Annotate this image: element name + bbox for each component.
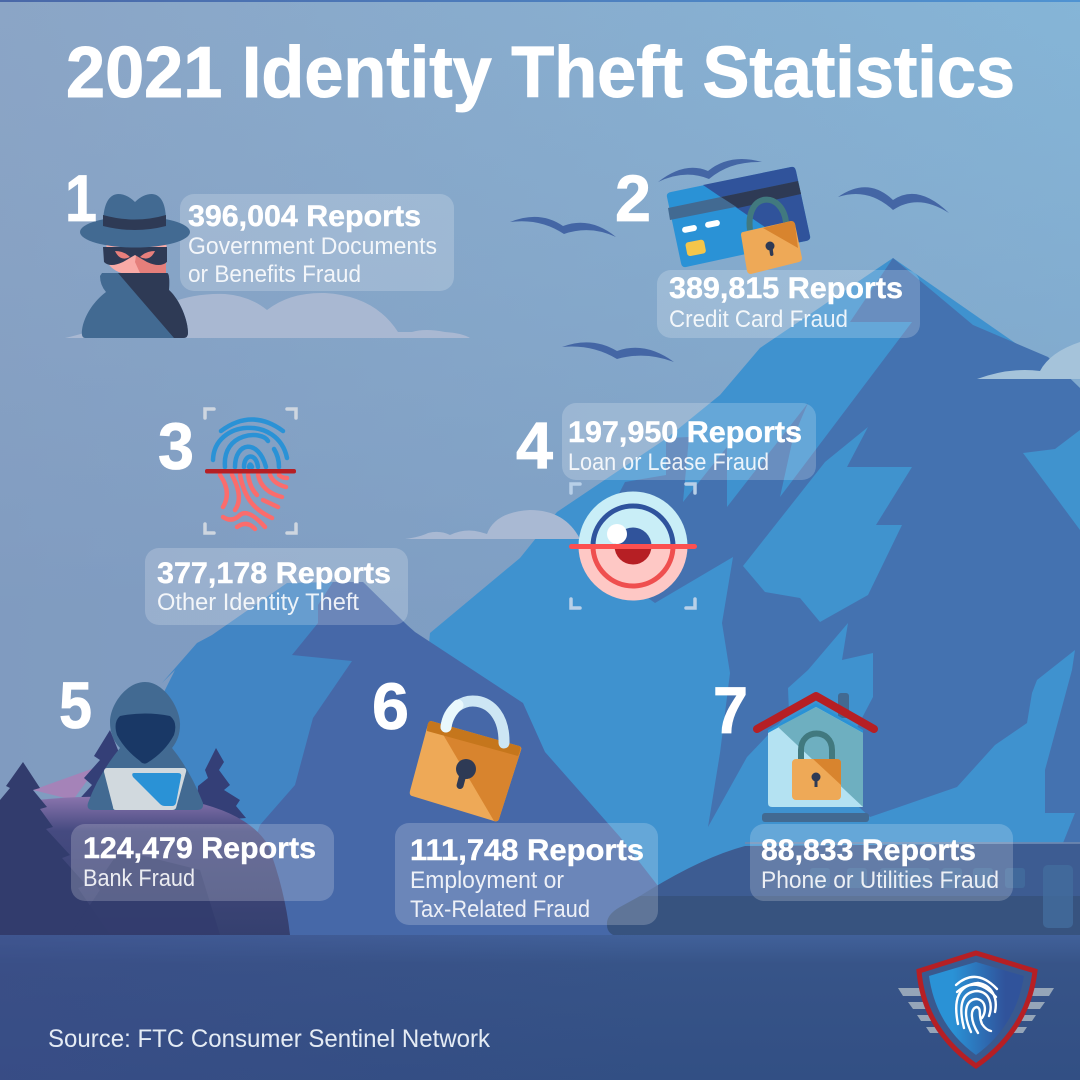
icon: spy in hat and mask bbox=[80, 194, 190, 338]
stat 2 figure: 389,815 Reports bbox=[669, 272, 903, 305]
clouds bbox=[65, 293, 1080, 539]
source note: Source: FTC Consumer Sentinel Network bbox=[48, 1025, 490, 1053]
number 3: 3 bbox=[158, 409, 194, 483]
stat 1: government documents or benefits fraud bbox=[65, 161, 454, 338]
stat 2: credit card fraud bbox=[615, 161, 920, 338]
stat 1 figure: 396,004 Reports bbox=[188, 200, 421, 233]
left mountain light face bbox=[40, 582, 640, 940]
stat 7: phone or utilities fraud bbox=[713, 673, 1013, 901]
title: 2021 Identity Theft Statistics bbox=[66, 33, 1015, 113]
stat 4 text panel bbox=[562, 403, 816, 480]
number 2: 2 bbox=[615, 161, 651, 235]
birds bbox=[510, 159, 949, 362]
stat 7 text panel bbox=[750, 824, 1013, 901]
stat 5 label: Bank Fraud bbox=[83, 865, 195, 892]
stat 7 figure: 88,833 Reports bbox=[761, 834, 976, 867]
stat 5: bank fraud bbox=[59, 668, 334, 901]
big mountain light patches bbox=[743, 427, 1080, 622]
stat 3 text panel bbox=[145, 548, 408, 625]
stat 6 text panel bbox=[395, 823, 658, 925]
stat 4 figure: 197,950 Reports bbox=[568, 416, 802, 449]
number 6: 6 bbox=[372, 669, 409, 743]
ground and lake band bbox=[0, 842, 1080, 1080]
icon: hooded hacker with laptop bbox=[88, 682, 203, 810]
icon: tilted orange padlock bbox=[410, 701, 521, 821]
big mountain light face bbox=[400, 258, 1080, 940]
logo: winged fingerprint shield bbox=[898, 953, 1054, 1066]
stat 7 label: Phone or Utilities Fraud bbox=[761, 867, 999, 894]
stat 3 figure: 377,178 Reports bbox=[157, 557, 391, 590]
stat 4: loan or lease fraud bbox=[516, 403, 816, 608]
stat 6 label: Tax-Related Fraud bbox=[410, 896, 590, 923]
icon: house with padlock bbox=[757, 693, 874, 822]
stat 5 figure: 124,479 Reports bbox=[83, 832, 316, 865]
number 1: 1 bbox=[65, 161, 97, 235]
icon: scanned eye bbox=[569, 484, 697, 608]
stat 6: employment or tax-related fraud bbox=[372, 669, 658, 925]
number 4: 4 bbox=[516, 408, 553, 482]
stat 6 label: Employment or bbox=[410, 867, 564, 894]
stat 1 label: Government Documents bbox=[188, 233, 437, 260]
big mountain shadow face bbox=[600, 258, 1080, 843]
icon: credit card with padlock bbox=[667, 167, 810, 274]
forested hill bbox=[0, 730, 290, 935]
stat 1 text panel bbox=[180, 194, 454, 291]
number 5: 5 bbox=[59, 668, 92, 742]
stat 3 label: Other Identity Theft bbox=[157, 589, 359, 616]
left mountain shadow face bbox=[220, 582, 700, 940]
icon: scanned fingerprint bbox=[205, 409, 296, 533]
stat 2 label: Credit Card Fraud bbox=[669, 306, 848, 333]
number 7: 7 bbox=[713, 673, 748, 747]
stat 2 text panel bbox=[657, 270, 920, 338]
stat 5 text panel bbox=[71, 824, 334, 901]
stat 3: other identity theft bbox=[145, 409, 408, 625]
stat 4 label: Loan or Lease Fraud bbox=[568, 449, 769, 476]
stat 6 figure: 111,748 Reports bbox=[410, 834, 644, 867]
stat 1 label: or Benefits Fraud bbox=[188, 261, 361, 288]
